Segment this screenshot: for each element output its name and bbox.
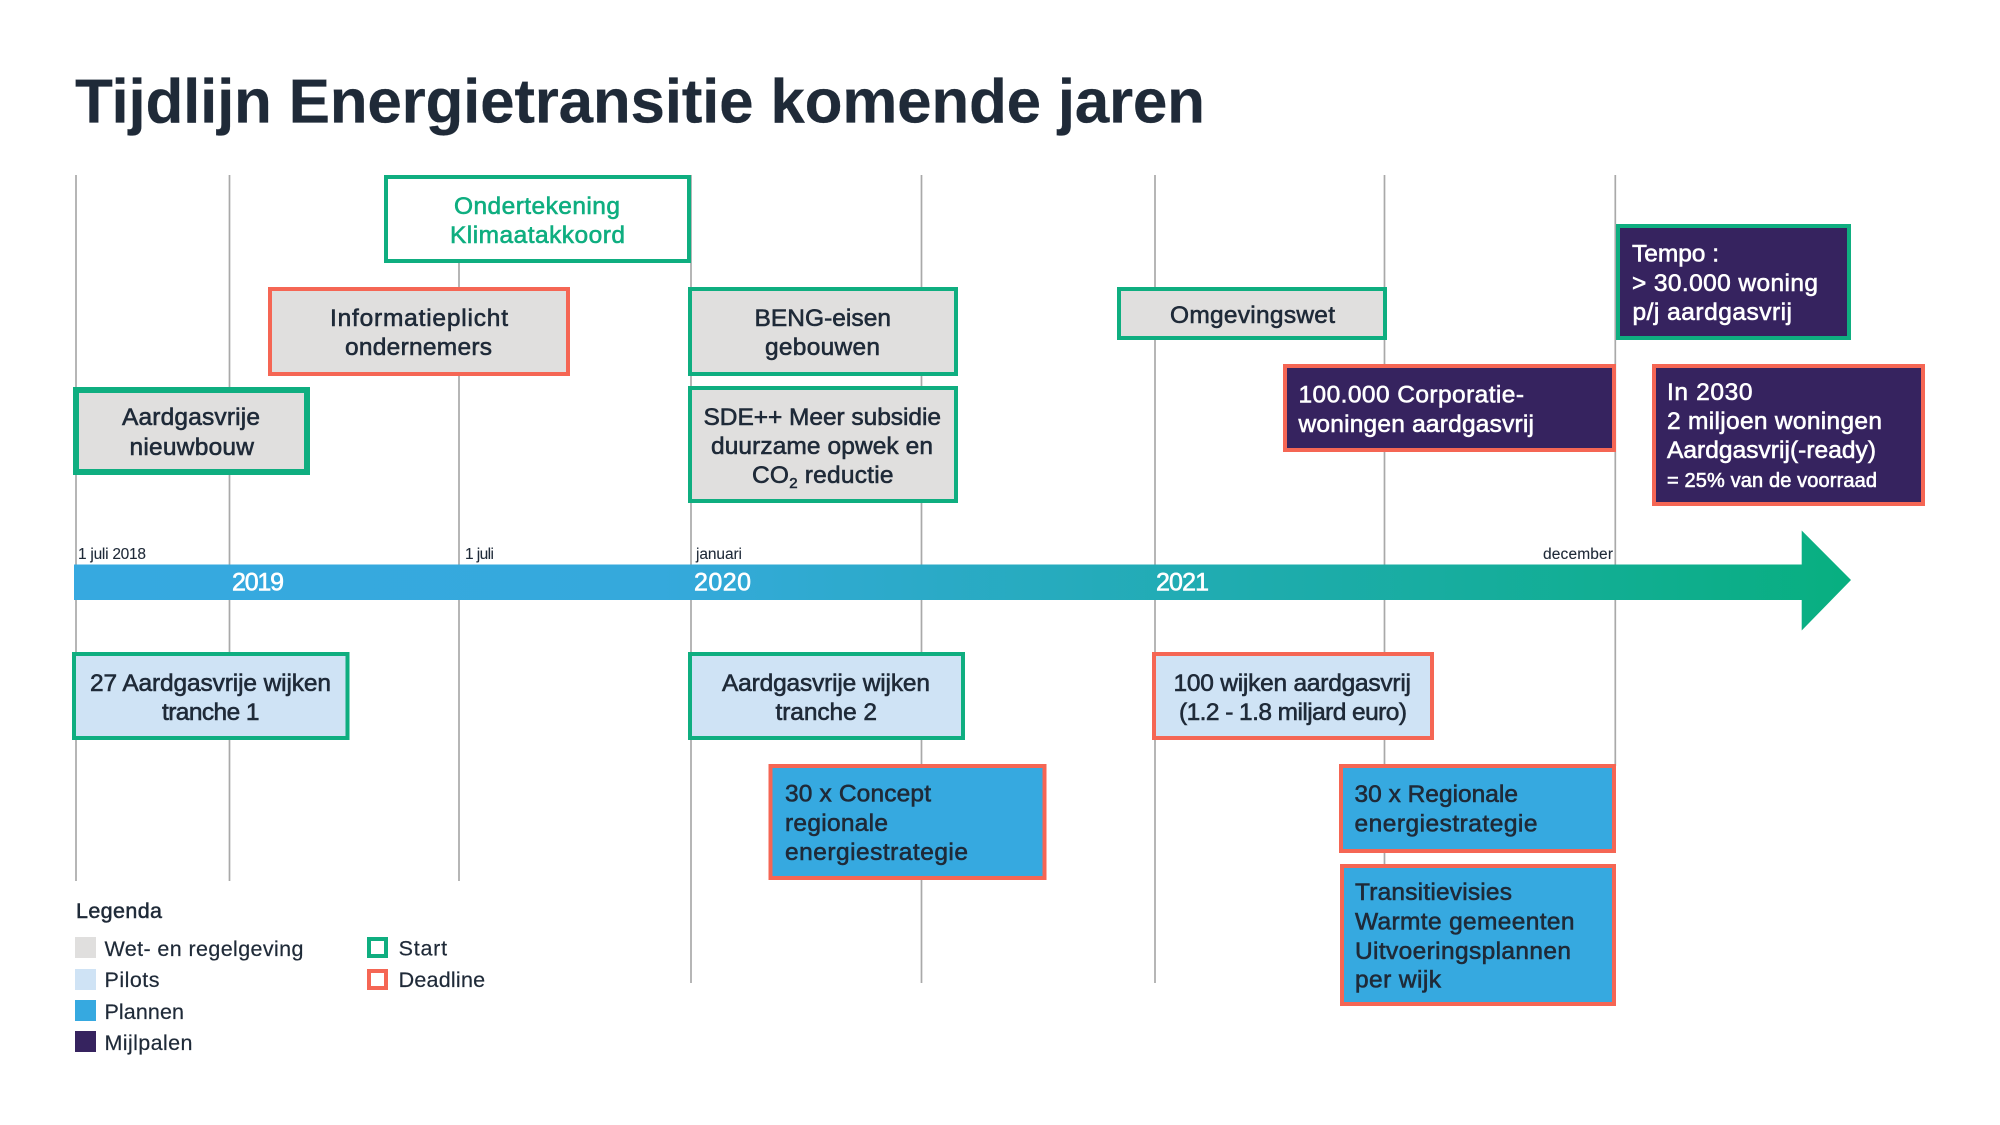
legend: [75, 899, 485, 1055]
year labels on the timeline: 2019: [232, 568, 284, 596]
box: Omgevingswet: Omgevingswet: [1170, 302, 1335, 329]
box: 100 wijken aardgasvrij: 100 wijken aardgasvrij: [1174, 670, 1411, 697]
box: In 2030 milestone: Aardgasvrij(-ready): [1667, 437, 1876, 464]
box: SDE++ Meer subsidie: 2: [789, 475, 798, 492]
box: BENG-eisen gebouwen: gebouwen: [765, 334, 880, 361]
box: 100.000 Corporatiewoningen milestone: 100.000 Corporatie-: [1298, 382, 1524, 408]
year labels on the timeline: [232, 568, 1209, 596]
legend: Start: Start: [399, 936, 447, 960]
box: 30 x Regionale energiestrategie: 30 x Regionale: [1354, 781, 1518, 808]
box: Aardgasvrije nieuwbouw: Aardgasvrije: [122, 404, 260, 431]
box: Ondertekening Klimaatakkoord: Ondertekening: [454, 193, 620, 220]
box: SDE++ Meer subsidie: reductie: [798, 462, 894, 489]
box: 100.000 Corporatiewoningen milestone: [1285, 366, 1614, 450]
box: In 2030 milestone: [1654, 366, 1923, 504]
box: Tempo milestone: [1618, 226, 1849, 338]
box: 27 Aardgasvrije wijken tranche 1: 27 Aardgasvrije wijken: [90, 670, 331, 697]
box: Informatieplicht ondernemers: [270, 289, 568, 374]
box: 27 Aardgasvrije wijken tranche 1: [74, 654, 348, 738]
legend heading: Legenda: [76, 899, 162, 923]
box: In 2030 milestone: In 2030: [1667, 379, 1752, 406]
box: BENG-eisen gebouwen: BENG-eisen: [754, 305, 891, 332]
legend: Pilots: Pilots: [104, 968, 160, 992]
box: Aardgasvrije wijken tranche 2: Aardgasvrije wijken: [722, 670, 930, 697]
box: 30 x Concept regionale energiestrategie: [770, 766, 1044, 878]
box: 30 x Concept regionale energiestrategie: 30 x Concept: [785, 780, 931, 808]
box: Aardgasvrije nieuwbouw: nieuwbouw: [130, 434, 254, 461]
date labels above the timeline: december: [1543, 546, 1613, 563]
legend: Mijlpalen: Mijlpalen: [104, 1031, 192, 1055]
box: SDE++ Meer subsidie: [690, 388, 956, 501]
box: Tempo milestone: Tempo :: [1632, 240, 1719, 268]
date labels above the timeline: januari: [695, 546, 742, 563]
box: Tempo milestone: > 30.000 woning: [1632, 270, 1818, 297]
box: 30 x Regionale energiestrategie: [1341, 766, 1614, 851]
box: Transitievisies: Transitievisies: [1355, 879, 1512, 906]
box: 27 Aardgasvrije wijken tranche 1: tranche 1: [162, 699, 260, 726]
box: Tempo milestone: p/j aardgasvrij: [1632, 299, 1792, 326]
date labels above the timeline: 1 juli: [465, 546, 494, 563]
box: 100 wijken aardgasvrij: [1154, 654, 1432, 738]
box: Transitievisies: [1342, 866, 1614, 1004]
box: Ondertekening Klimaatakkoord: [386, 177, 689, 261]
box: Transitievisies: Warmte gemeenten: [1355, 908, 1574, 936]
box: Informatieplicht ondernemers: Informatieplicht: [330, 305, 508, 332]
box: SDE++ Meer subsidie: SDE++ Meer subsidie: [704, 404, 941, 431]
box: In 2030 milestone: 2 miljoen woningen: [1667, 408, 1882, 435]
box: Aardgasvrije nieuwbouw: [76, 390, 307, 472]
box: 100.000 Corporatiewoningen milestone: woningen aardgasvrij: [1298, 411, 1534, 438]
legend: Wet- en regelgeving: Wet- en regelgeving: [104, 937, 304, 961]
box: SDE++ Meer subsidie: CO: [752, 462, 789, 489]
timeline arrow: [74, 530, 1851, 630]
box: 100 wijken aardgasvrij: (1.2 - 1.8 miljard euro): [1179, 699, 1407, 726]
year labels on the timeline: 2020: [694, 568, 751, 596]
box: Ondertekening Klimaatakkoord: Klimaatakkoord: [450, 222, 625, 249]
legend: Pilots: [75, 968, 160, 992]
box: SDE++ Meer subsidie: duurzame opwek en: [711, 433, 933, 460]
box: 30 x Concept regionale energiestrategie: regionale: [785, 810, 888, 837]
box: BENG-eisen gebouwen: [690, 289, 956, 374]
box: 30 x Concept regionale energiestrategie: energiestrategie: [785, 839, 968, 866]
legend: Start: [369, 936, 447, 960]
box: Transitievisies: Uitvoeringsplannen: [1355, 938, 1571, 965]
box: Omgevingswet: [1119, 289, 1385, 338]
box: In 2030 milestone: = 25% van de voorraad: [1667, 470, 1877, 492]
date labels above the timeline: 1 juli 2018: [78, 546, 146, 563]
date labels above the timeline: [78, 546, 1613, 563]
box: Transitievisies: per wijk: [1355, 966, 1442, 994]
year labels on the timeline: 2021: [1156, 568, 1209, 596]
legend: Deadline: Deadline: [399, 968, 485, 992]
box: 30 x Regionale energiestrategie: energiestrategie: [1354, 810, 1538, 838]
box: Aardgasvrije wijken tranche 2: tranche 2: [776, 699, 877, 726]
legend: Plannen: Plannen: [104, 1000, 184, 1024]
title: Tijdlijn Energietransitie komende jaren: [75, 68, 1205, 136]
box: Aardgasvrije wijken tranche 2: [690, 654, 963, 738]
box: Informatieplicht ondernemers: ondernemers: [345, 334, 492, 361]
vertical time gridlines: [76, 175, 1615, 983]
